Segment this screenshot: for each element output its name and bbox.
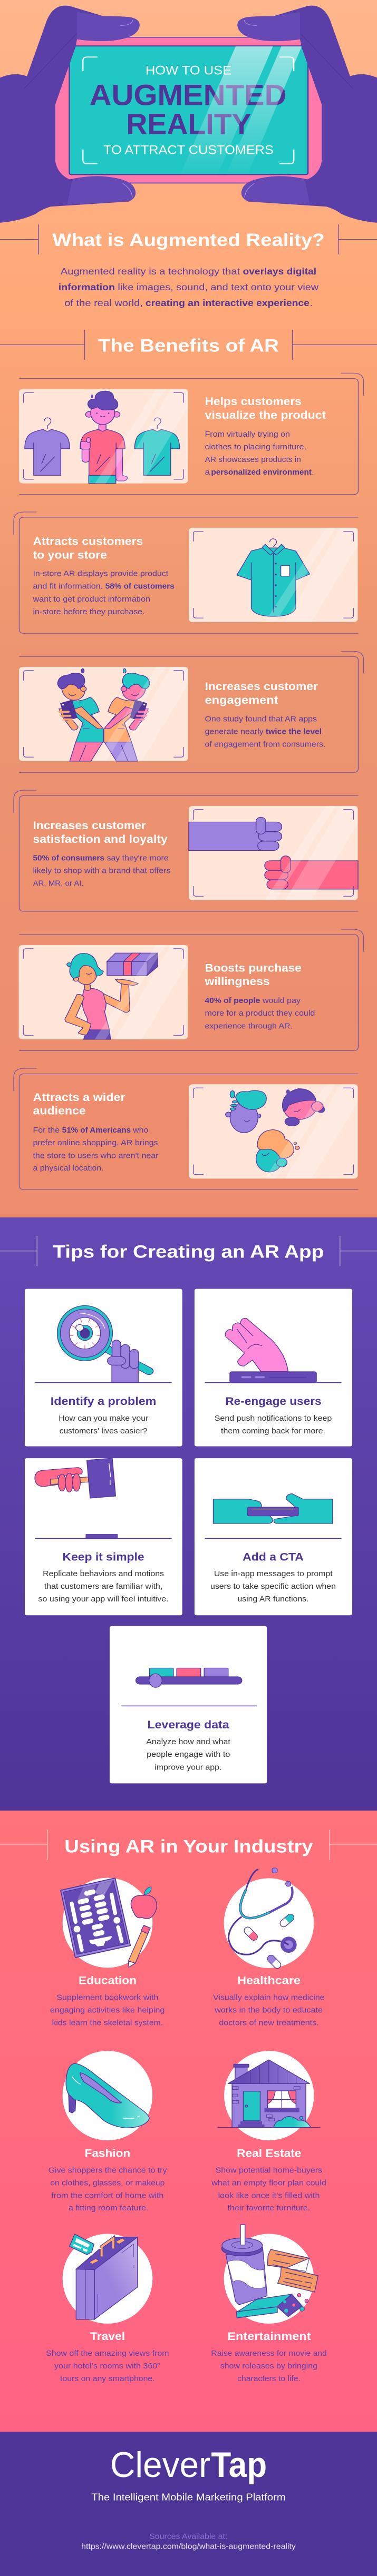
card text <box>215 1395 332 1436</box>
text: wider audience: a physical location. <box>33 1164 104 1173</box>
illustration: button-up shirt <box>237 539 310 616</box>
card: leverage data <box>110 1626 267 1783</box>
icon: entertainment drink tickets candy <box>221 2225 318 2324</box>
background: footer band <box>0 2432 377 2576</box>
text: helps customers visualize: . <box>312 468 314 477</box>
text: healthcare: Visually explain how medicine <box>213 1993 325 2002</box>
text: engagement: Increases customer <box>205 680 318 693</box>
icon: magnifier with eye <box>57 1305 149 1383</box>
text: healthcare: doctors of new treatments. <box>219 2019 319 2027</box>
right hand holding phone <box>237 6 377 223</box>
text: wider audience: For the <box>33 1126 60 1135</box>
illustration: two fist bump arms <box>189 817 358 889</box>
icon: hand with hammer <box>35 1458 118 1539</box>
heading: the benefits of AR: The Benefits of AR <box>98 336 279 356</box>
text: entertainment: Raise awareness for movie and <box>211 2349 327 2358</box>
icon: real estate house <box>218 2051 320 2140</box>
panel: attracts a wider audience <box>14 1068 358 1189</box>
card text <box>51 1395 156 1436</box>
card text: people engage with to <box>147 1751 230 1759</box>
text: attracts customers: and fit information. <box>33 583 103 591</box>
text: fashion: from the comfort of home with <box>51 2191 164 2200</box>
panel: satisfaction and loyalty <box>14 790 358 911</box>
card text: so using your app will feel intuitive. <box>38 1595 169 1604</box>
card text: Identify a problem <box>51 1395 156 1408</box>
card text: Add a CTA <box>243 1550 304 1563</box>
card: identify a problem <box>25 1289 182 1447</box>
footer logo: CleverTap: Clever <box>110 2445 210 2485</box>
text: fashion: a fitting room feature. <box>69 2204 148 2213</box>
hero band <box>0 6 377 308</box>
illustration: man between two t-shirts <box>25 391 180 484</box>
heading: the benefits of AR <box>0 330 377 360</box>
card text: Leverage data <box>148 1718 230 1731</box>
text: attracts customers: in-store before they purchase. <box>33 608 145 616</box>
background: purple tips section <box>0 1217 377 1811</box>
tips band <box>25 1289 352 1615</box>
footer tagline: The Intelligent Mobile Marketing Platform <box>91 2492 286 2503</box>
text: attracts customers: to your store <box>33 548 107 561</box>
heading: using AR in your industry <box>0 1830 377 1860</box>
text: satisfaction <box>33 819 170 888</box>
text: real estate: look like once it’s filled with <box>218 2191 320 2200</box>
phone with title: AUGMENTED <box>90 79 287 112</box>
text: real estate: what an empty floor plan could <box>211 2179 326 2187</box>
text: satisfaction: 50% of consumers <box>33 854 104 862</box>
text: wider audience: prefer online shopping, AR brings <box>33 1139 158 1147</box>
definition paragraph: creating an interactive experience <box>146 298 310 308</box>
text: education: Education <box>79 1974 137 1987</box>
illustration: two people back to back with phones <box>57 668 150 761</box>
definition paragraph: Augmented reality is a technology that <box>61 267 240 277</box>
text: helps customers visualize <box>205 395 326 477</box>
left hand holding phone <box>0 6 140 223</box>
benefits band 3 <box>0 929 377 1266</box>
tips band lower and industry heading <box>0 1626 377 1860</box>
text: helps customers visualize: visualize the product <box>205 409 326 421</box>
heading: what is AR: What is Augmented Reality? <box>52 230 325 250</box>
text: attracts customers: 58% of customers <box>105 583 175 591</box>
card: re-engage users <box>195 1289 352 1447</box>
definition paragraph <box>59 267 319 308</box>
text: purchase willingness: would pay <box>262 997 301 1005</box>
text: wider audience: who <box>132 1126 148 1135</box>
industries band <box>49 1974 326 2213</box>
text: helps customers visualize: personalized environment <box>211 468 312 477</box>
phone with title: TO ATTRACT CUSTOMERS <box>103 143 274 157</box>
icon: hand tapping phone <box>225 1318 316 1383</box>
benefits band 1 <box>0 330 377 633</box>
card text: How can you make your <box>59 1414 149 1423</box>
definition paragraph: information <box>59 282 115 293</box>
definition paragraph: overlays digital <box>243 267 316 277</box>
text: travel: Show off the amazing views from <box>46 2349 169 2358</box>
industries band lower and footer <box>46 2330 327 2551</box>
card text: improve your app. <box>154 1763 221 1772</box>
text: purchase willingness: more for a product they could <box>205 1009 315 1018</box>
icon: travel briefcase and tag <box>63 2234 152 2324</box>
icon: fashion high heel shoe <box>63 2051 152 2140</box>
text: satisfaction: satisfaction and loyalty <box>33 833 168 845</box>
illustration: three faces <box>226 1089 325 1172</box>
card text <box>210 1550 336 1604</box>
text: attracts customers: Attracts customers <box>33 535 143 547</box>
card text <box>38 1550 169 1604</box>
text: satisfaction: say they're more <box>107 854 169 862</box>
footer logo: CleverTap: Tap <box>211 2445 267 2485</box>
text: fashion: on clothes, glasses, or makeup <box>50 2179 165 2187</box>
card text: Re-engage users <box>225 1395 322 1408</box>
text: travel: your hotel’s rooms with 360° <box>54 2362 161 2371</box>
definition paragraph: . <box>310 298 313 308</box>
text: attracts customers: want to get product information <box>32 595 150 603</box>
text: wider audience: Attracts a wider <box>33 1091 125 1104</box>
card text: using AR functions. <box>238 1595 309 1604</box>
phone with title: HOW TO USE <box>146 63 231 77</box>
text: travel: Travel <box>90 2330 125 2343</box>
background: peach benefits section <box>0 0 377 1217</box>
text: helps customers visualize: Helps customers <box>205 395 302 408</box>
text: helps customers visualize: From virtually trying on <box>205 430 290 438</box>
card text: Use in-app messages to prompt <box>214 1570 333 1578</box>
text: attracts customers: In-store AR displays provide product <box>33 570 169 578</box>
illustration: woman holding a floating package <box>65 953 158 1039</box>
text: education: kids learn the skeletal system. <box>52 2019 163 2027</box>
text: attracts customers <box>32 535 175 616</box>
heading: tips for creating an AR app: Tips for Creating an AR App <box>53 1242 324 1262</box>
text: travel <box>46 2330 169 2383</box>
footer sources <box>81 2532 296 2551</box>
text: healthcare: Healthcare <box>237 1974 301 1987</box>
text: entertainment: characters to life. <box>237 2375 301 2383</box>
panel: boosts purchase willingness <box>19 929 363 1050</box>
text: real estate <box>211 2147 326 2213</box>
card text: users to take specific action when <box>210 1582 336 1591</box>
text: wider audience: audience <box>33 1105 86 1117</box>
card text: Keep it simple <box>63 1550 144 1563</box>
text: education: Supplement bookwork with <box>56 1993 159 2002</box>
heading: what is AR <box>0 224 377 254</box>
phone with title <box>55 37 322 183</box>
text: wider audience <box>33 1091 159 1173</box>
panel: increases customer engagement <box>19 651 363 772</box>
text: healthcare <box>213 1974 325 2027</box>
text: wider audience: 51% of Americans <box>62 1126 131 1135</box>
text: satisfaction: AR, MR, or AI. <box>33 880 84 888</box>
text: helps customers visualize: AR showcases products in <box>205 456 301 464</box>
benefits band 2 <box>14 651 363 911</box>
footer sources: https://www.clevertap.com/blog/what-is-augmented-reality <box>81 2542 296 2551</box>
footer sources: Sources Available at: <box>149 2532 227 2541</box>
text: engagement: of engagement from consumers. <box>205 741 325 749</box>
icon: hands holding a phone <box>213 1493 333 1523</box>
text: wider audience: the store to users who aren't near <box>33 1152 159 1160</box>
card: keep it simple <box>25 1458 182 1615</box>
text: real estate: Real Estate <box>237 2147 301 2159</box>
text: engagement <box>205 680 325 749</box>
icon: healthcare stethoscope and pills <box>224 1868 314 1970</box>
card text: them coming back for more. <box>221 1427 325 1436</box>
icon: slider with tiles <box>136 1668 242 1687</box>
background: pink industry section <box>0 1811 377 2432</box>
text: helps customers visualize: a <box>205 468 210 477</box>
text: purchase willingness: 40% of people <box>205 997 260 1005</box>
text: engagement: One study found that AR apps <box>205 715 317 723</box>
text: satisfaction: Increases customer <box>33 819 146 831</box>
panel: visualize the product <box>19 373 363 495</box>
heading: tips for creating an AR app <box>0 1236 377 1266</box>
text: engagement: generate nearly <box>205 728 264 736</box>
text: entertainment <box>211 2330 327 2383</box>
text: fashion: Give shoppers the chance to try <box>49 2166 167 2175</box>
text: purchase willingness: Boosts purchase <box>205 961 302 974</box>
card text: Send push notifications to keep <box>215 1414 332 1423</box>
text: education: engaging activities like helping <box>50 2006 165 2014</box>
phone with title: REALITY <box>126 107 252 140</box>
text: fashion: Fashion <box>85 2147 130 2159</box>
text: travel: tours on any smartphone. <box>60 2375 155 2383</box>
icon: education x-ray apple pencil <box>61 1878 157 1968</box>
text: engagement: twice the level <box>266 728 322 736</box>
text: real estate: their favorite furniture. <box>227 2204 310 2213</box>
text: education <box>50 1974 165 2027</box>
text: fashion <box>49 2147 167 2213</box>
card text: Replicate behaviors and motions <box>43 1570 164 1578</box>
heading: using AR in your industry: Using AR in Your Industry <box>64 1837 313 1857</box>
text: purchase willingness <box>205 961 315 1030</box>
text: real estate: Show potential home-buyers <box>216 2166 322 2175</box>
definition paragraph: of the real world, <box>64 298 143 308</box>
text: entertainment: Entertainment <box>227 2330 311 2343</box>
text: helps customers visualize: clothes to placing furniture, <box>205 443 306 451</box>
panel: attracts customers to your store <box>14 512 358 633</box>
card text <box>146 1718 230 1772</box>
definition paragraph: like images, sound, and text onto your view <box>118 282 319 293</box>
text: engagement: engagement <box>205 694 278 706</box>
text: purchase willingness: willingness <box>205 975 270 988</box>
card text: customers' lives easier? <box>60 1427 148 1436</box>
text: purchase willingness: experience through AR. <box>205 1022 293 1030</box>
text: healthcare: works in the body to educate <box>214 2006 323 2014</box>
card text: that customers are familiar with, <box>44 1582 162 1591</box>
card: add a CTA <box>195 1458 352 1615</box>
text: entertainment: show releases by bringing <box>220 2362 317 2371</box>
text: satisfaction: likely to shop with a brand that offers <box>33 867 170 875</box>
card text: Analyze how and what <box>146 1738 230 1746</box>
